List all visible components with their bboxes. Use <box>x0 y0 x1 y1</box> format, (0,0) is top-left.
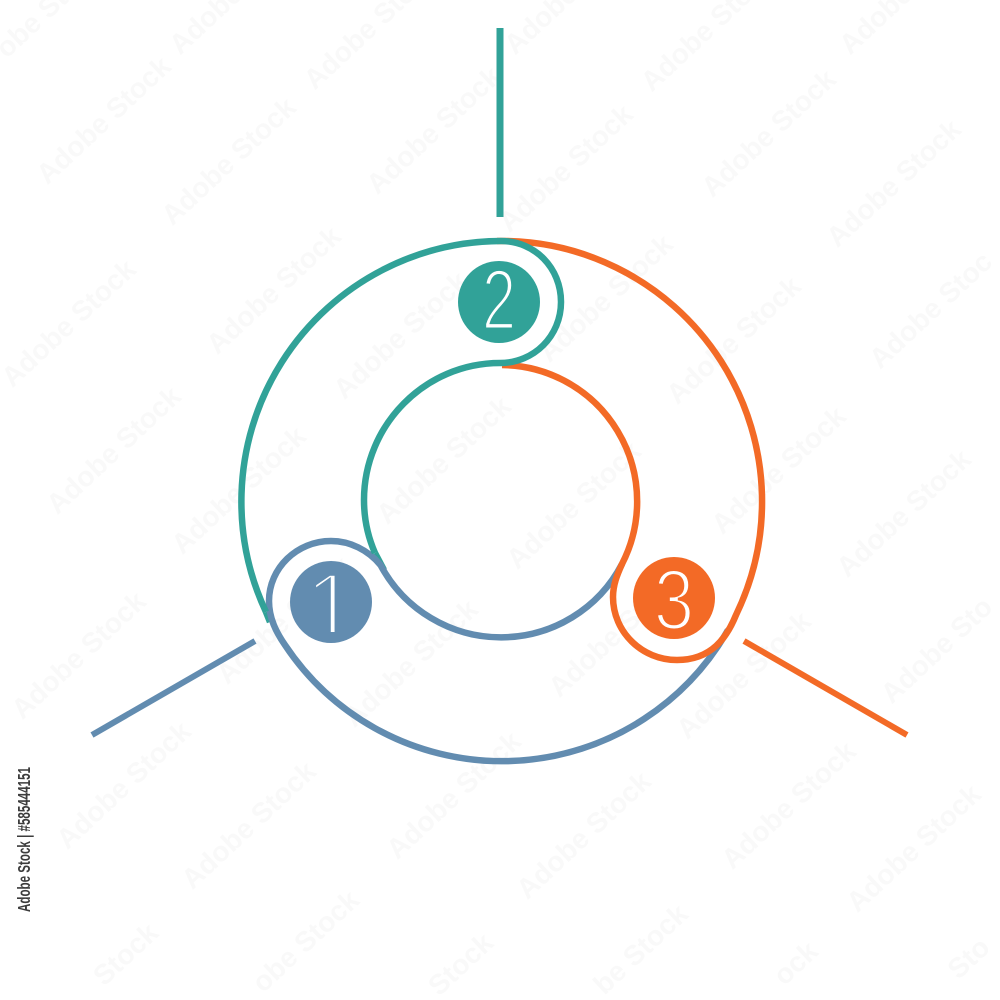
text: Adobe Stock <box>200 220 347 360</box>
ring segment: step 2 teal, lower ends <box>266 553 384 622</box>
text: Adobe Stock <box>30 50 177 190</box>
text: Adobe Stock <box>510 765 657 905</box>
text: Adobe Stock <box>175 755 322 895</box>
text: Adobe Stock <box>820 113 967 253</box>
text: Adobe Stock <box>542 563 689 703</box>
text: Adobe Stock <box>660 270 807 410</box>
text: Adobe Stock <box>532 228 679 368</box>
text: Adobe Stock <box>40 380 187 520</box>
connector line: step 1 (lower left) <box>92 641 255 735</box>
text: Adobe Stock <box>165 420 312 560</box>
text: Adobe Stock <box>327 265 474 405</box>
text: Sto <box>941 931 996 985</box>
text: Adobe Stock <box>500 435 647 575</box>
connector line: step 2 (top) <box>496 28 504 217</box>
connector line: step 3 (lower right) <box>744 641 907 735</box>
text: Adobe Stock <box>715 735 862 875</box>
ring segment: step 2 teal <box>241 241 561 612</box>
text: Adobe Stock <box>210 550 357 690</box>
text: Adobe Stock <box>337 593 484 733</box>
text: Adobe Stock <box>670 605 817 745</box>
text: Adobe Stock <box>695 63 842 203</box>
badge: step 3 <box>633 552 715 647</box>
badge: step 1 <box>290 561 372 643</box>
text: obe Stock <box>246 884 365 998</box>
text: Adobe Stock <box>380 725 527 865</box>
text: Adobe Stock <box>50 715 197 855</box>
number 2: 2 <box>482 252 516 347</box>
text: ock <box>767 935 824 991</box>
text: Adobe Stock <box>5 585 152 725</box>
text: Adobe Stock <box>705 400 852 540</box>
text: Stock <box>422 926 499 1000</box>
number 3: 3 <box>654 552 694 647</box>
ring segment: step 1 blue <box>269 541 728 761</box>
text: Adobe Stock <box>370 390 517 530</box>
text: Adobe Stock <box>830 443 977 583</box>
badge: step 2 <box>458 252 540 347</box>
number 1: 1 <box>305 553 357 658</box>
text: Stock <box>87 916 164 991</box>
text: Adobe Stock <box>840 778 987 918</box>
text: Adobe Stock <box>360 60 507 200</box>
text: Adobe Stock <box>155 91 302 231</box>
stock id caption: Adobe Stock | #585444151 <box>14 767 34 912</box>
text: be Stock <box>587 898 694 1000</box>
text: Adobe Sto <box>875 591 998 709</box>
text: Adobe Stoc <box>863 246 998 374</box>
ring segment: step 3 orange <box>497 241 762 660</box>
text: Adobe Stock <box>492 98 639 238</box>
